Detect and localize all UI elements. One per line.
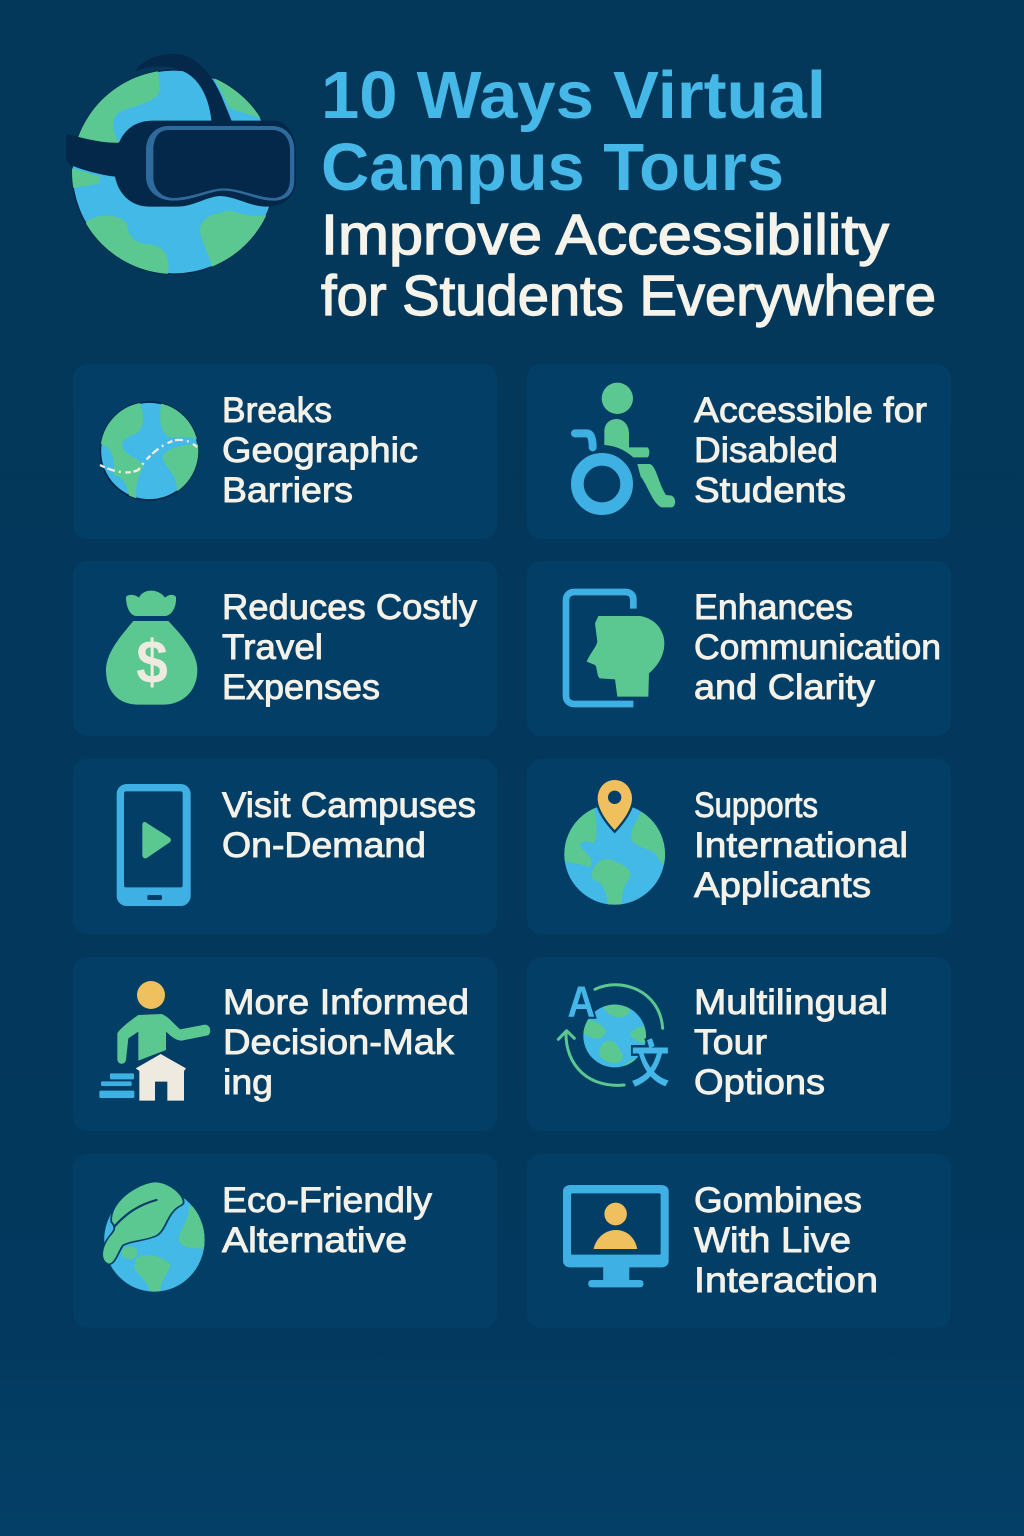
- text: accessible for disabled students: Disabled: [694, 431, 838, 470]
- icon: phone with play button: [117, 784, 191, 906]
- title: 10 Ways Virtual: [321, 58, 826, 133]
- text: eco-friendly alternative: Alternative: [222, 1221, 407, 1260]
- panel: multilingual tour options: [527, 957, 951, 1131]
- title: Improve Accessibility: [321, 203, 890, 267]
- text: more informed decision-making: More Informed: [223, 983, 469, 1022]
- text: reduces costly travel expenses: Travel: [222, 628, 323, 667]
- text: more informed decision-making: [223, 983, 469, 1102]
- text: multilingual tour options: [694, 983, 888, 1102]
- text: enhances communication and clarity: Enhances: [694, 588, 853, 627]
- panel: visit campuses on-demand: [73, 759, 497, 934]
- text: visit campuses on-demand: [222, 786, 476, 865]
- text: combines with live interaction: With Live: [694, 1221, 851, 1260]
- icon: globe with translation symbols: 文: [631, 1036, 669, 1093]
- text: supports international applicants: Applicants: [694, 866, 871, 905]
- text: combines with live interaction: [694, 1181, 878, 1300]
- text: accessible for disabled students: [694, 391, 927, 510]
- text: multilingual tour options: Options: [694, 1063, 825, 1102]
- panel: more informed decision-making: [73, 957, 497, 1131]
- panel: breaks geographic barriers: [73, 364, 497, 539]
- text: more informed decision-making: Decision-Mak: [223, 1023, 455, 1062]
- text: reduces costly travel expenses: Reduces Costly: [222, 588, 478, 627]
- header icon: globe wearing VR headset: [63, 54, 296, 280]
- text: supports international applicants: Supports: [694, 786, 818, 825]
- text: breaks geographic barriers: Barriers: [222, 471, 353, 510]
- title: [321, 58, 936, 328]
- panel: supports international applicants: [527, 759, 951, 934]
- panel: enhances communication and clarity: [527, 561, 951, 736]
- icon: globe with leaf: [103, 1182, 207, 1293]
- title: Campus Tours: [321, 130, 784, 205]
- text: supports international applicants: [694, 786, 908, 905]
- text: supports international applicants: International: [694, 826, 908, 865]
- text: enhances communication and clarity: [694, 588, 941, 707]
- text: multilingual tour options: Multilingual: [694, 983, 888, 1022]
- text: breaks geographic barriers: Breaks: [222, 391, 332, 430]
- icon: monitor with presenter: [563, 1185, 669, 1287]
- text: enhances communication and clarity: and Clarity: [694, 668, 876, 707]
- icon: globe with location pin: [562, 780, 668, 907]
- panel: combines with live interaction: [527, 1154, 951, 1328]
- icon: globe with translation symbols: A: [567, 976, 595, 1026]
- text: combines with live interaction: Gombines: [694, 1181, 862, 1220]
- text: reduces costly travel expenses: Expenses: [222, 668, 380, 707]
- panel: reduces costly travel expenses: [73, 561, 497, 736]
- icon: globe with dashed route: [98, 400, 202, 502]
- text: enhances communication and clarity: Communication: [694, 628, 941, 667]
- text: eco-friendly alternative: [222, 1181, 433, 1260]
- text: eco-friendly alternative: Eco-Friendly: [222, 1181, 433, 1220]
- text: breaks geographic barriers: [222, 391, 418, 510]
- text: visit campuses on-demand: On-Demand: [222, 826, 426, 865]
- panel: accessible for disabled students: [527, 364, 951, 539]
- text: reduces costly travel expenses: [222, 588, 478, 707]
- text: more informed decision-making: ing: [223, 1063, 273, 1102]
- icon: globe with translation symbols: [556, 983, 669, 1087]
- icon: wheelchair user: [575, 383, 675, 509]
- panel: eco-friendly alternative: [73, 1154, 497, 1328]
- icon: money bag: [106, 591, 197, 705]
- text: combines with live interaction: Interaction: [694, 1261, 878, 1300]
- text: multilingual tour options: Tour: [694, 1023, 767, 1062]
- text: breaks geographic barriers: Geographic: [222, 431, 418, 470]
- icon: person moving toward a house: [99, 981, 210, 1101]
- icon: money bag: $: [136, 627, 168, 697]
- icon: head profile in a phone: [566, 592, 664, 704]
- text: accessible for disabled students: Students: [694, 471, 846, 510]
- title: for Students Everywhere: [321, 264, 936, 328]
- text: accessible for disabled students: Accessible for: [694, 391, 927, 430]
- text: visit campuses on-demand: Visit Campuses: [222, 786, 476, 825]
